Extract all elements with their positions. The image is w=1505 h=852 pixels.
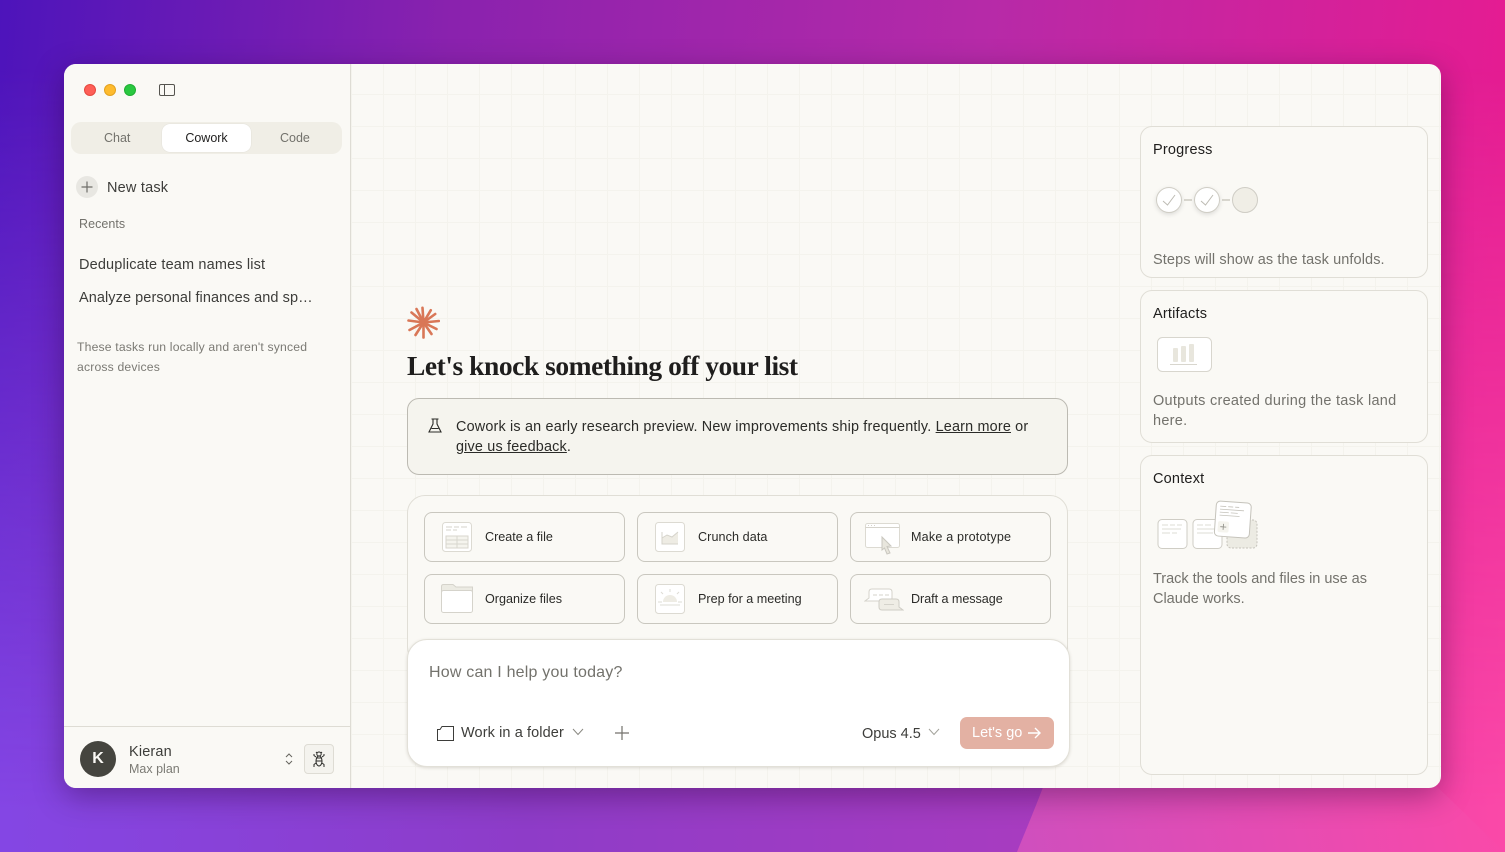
artifacts description: here. <box>1153 413 1187 429</box>
user footer <box>64 726 350 788</box>
task suggestions panel <box>407 495 1068 665</box>
context description <box>1153 571 1367 607</box>
local tasks note: across devices <box>77 360 160 374</box>
plan: Max plan <box>129 762 180 776</box>
notice text <box>456 419 1028 455</box>
app window <box>64 64 1441 788</box>
icon: spreadsheet <box>442 522 472 552</box>
tab: code: Code <box>280 131 310 145</box>
recents heading: Recents <box>79 217 125 231</box>
icon: folder chevron <box>572 728 584 736</box>
tile: draft a message: Draft a message <box>911 592 1003 606</box>
canvas grid <box>1439 70 1440 782</box>
context heading: Context <box>1153 471 1204 487</box>
new task button <box>76 176 168 198</box>
tile: crunch data <box>637 512 838 562</box>
local tasks note <box>77 340 307 374</box>
user name: Kieran <box>129 744 172 760</box>
artifacts description <box>1153 393 1396 429</box>
notice text: Cowork is an early research preview. New improvements ship frequently. Learn more or <box>456 419 1028 435</box>
chat input <box>407 639 1070 767</box>
tile: draft a message <box>850 574 1051 624</box>
tile: organize files <box>424 574 625 624</box>
progress steps <box>1155 187 1258 216</box>
icon: sidebar toggle <box>159 84 175 96</box>
model selector: Opus 4.5 <box>862 726 921 742</box>
tile: create a file <box>424 512 625 562</box>
tile: prep for a meeting: Prep for a meeting <box>698 592 802 606</box>
avatar <box>80 741 116 777</box>
icon: plus <box>76 176 98 198</box>
preview notice <box>407 398 1068 475</box>
icon: sunrise <box>655 584 685 614</box>
tile: crunch data: Crunch data <box>698 530 768 544</box>
notice text: give us feedback. <box>456 439 571 455</box>
panel: artifacts <box>1140 290 1428 443</box>
new task button: New task <box>107 180 168 196</box>
tab: cowork active <box>162 124 251 152</box>
title: Let's knock something off your list <box>407 350 798 381</box>
recent task 1: Deduplicate team names list <box>79 257 265 273</box>
tile: organize files: Organize files <box>485 592 562 606</box>
icon: bug button <box>304 744 334 774</box>
submit button: Let's go <box>972 725 1022 741</box>
tile: create a file: Create a file <box>485 530 553 544</box>
progress description: Steps will show as the task unfolds. <box>1153 252 1385 268</box>
sidebar <box>64 64 351 788</box>
submit button <box>960 717 1054 749</box>
avatar: K <box>92 750 104 767</box>
tile: prep for a meeting <box>637 574 838 624</box>
artifacts description: Outputs created during the task land <box>1153 393 1396 409</box>
artifacts heading: Artifacts <box>1153 306 1207 322</box>
mode tabs <box>71 122 342 154</box>
icon: add <box>615 726 629 740</box>
context description: Track the tools and files in use as <box>1153 571 1367 587</box>
artifact chart icon <box>1157 337 1212 372</box>
recent task 2: Analyze personal finances and sp… <box>79 290 313 306</box>
panel: progress <box>1140 126 1428 278</box>
icon: browser cursor <box>865 523 900 554</box>
context description: Claude works. <box>1153 591 1245 607</box>
local tasks note: These tasks run locally and aren't synced <box>77 340 307 354</box>
window controls <box>84 84 136 96</box>
tile: make a prototype <box>850 512 1051 562</box>
context file cards <box>1158 500 1258 549</box>
icon: model chevron <box>928 728 940 736</box>
panel: context <box>1140 455 1428 775</box>
tile: make a prototype: Make a prototype <box>911 530 1011 544</box>
logo: orange starburst <box>407 306 440 339</box>
tab: cowork active: Cowork <box>185 131 228 145</box>
icon: folder <box>441 584 473 613</box>
progress heading: Progress <box>1153 142 1213 158</box>
icon: folder outline <box>437 726 454 741</box>
icon: chat bubbles <box>864 588 904 610</box>
icon: flask <box>428 418 442 432</box>
input placeholder: How can I help you today? <box>429 664 623 681</box>
icon: arrow <box>1028 728 1041 738</box>
icon: area chart <box>655 522 685 552</box>
icon: chevrons <box>286 753 292 765</box>
folder selector: Work in a folder <box>461 725 564 741</box>
tab: chat: Chat <box>104 131 130 145</box>
